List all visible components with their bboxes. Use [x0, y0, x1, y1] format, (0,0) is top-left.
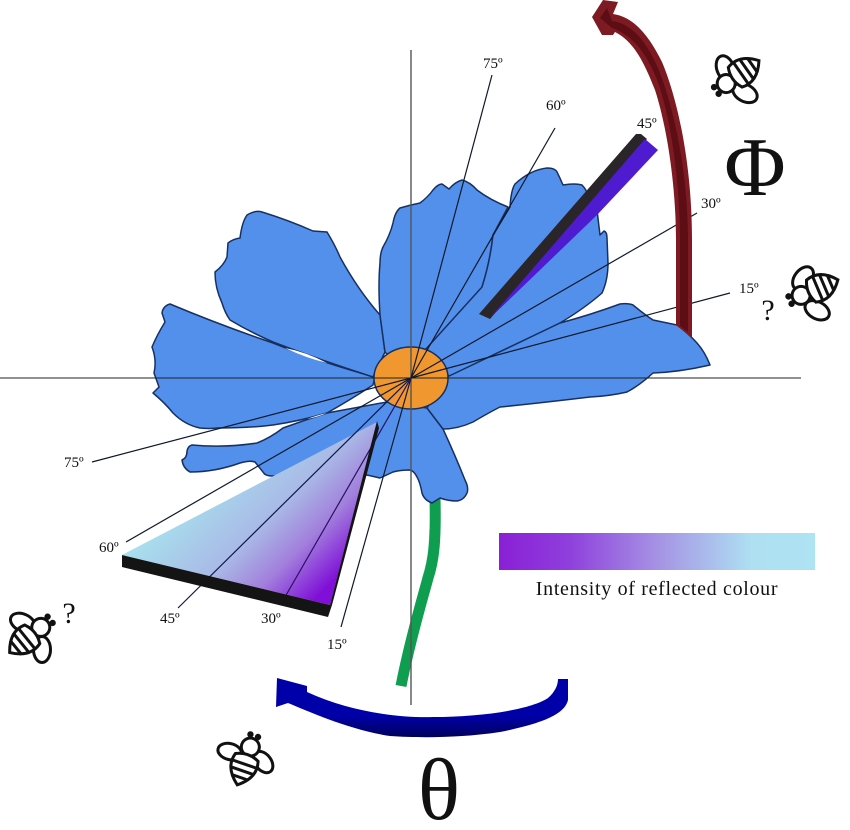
- angle labels: 45º: [637, 116, 657, 132]
- reflectance triangle: [122, 378, 411, 617]
- reflectance bar at 45 degrees: [479, 134, 658, 319]
- angle labels: 75º: [64, 455, 84, 471]
- symbol: phi: Φ: [724, 121, 786, 214]
- axis lines: [0, 50, 801, 705]
- icon: bee right: [777, 253, 850, 333]
- angle labels: 45º: [160, 611, 180, 627]
- icon: bee left: [0, 595, 72, 679]
- angle labels: 75º: [483, 56, 503, 72]
- petal: right: [427, 304, 710, 429]
- petal: top: [379, 180, 508, 378]
- angle lines: [92, 75, 730, 627]
- angle labels: 30º: [261, 611, 281, 627]
- petal gaps: [285, 348, 327, 419]
- icon: bee top right: [699, 38, 778, 119]
- angle labels: 15º: [327, 637, 347, 653]
- angle labels: 60º: [546, 98, 566, 114]
- angle labels: 15º: [739, 281, 759, 297]
- petal: left: [152, 304, 375, 428]
- petal: lower left and bottom: [182, 402, 468, 503]
- angle labels: [64, 56, 759, 653]
- legend gradient bar: [499, 533, 815, 570]
- angle labels: 30º: [701, 196, 721, 212]
- icon: bee bottom: [208, 724, 284, 795]
- petal: upper left: [215, 211, 385, 377]
- arrow: theta, dark blue: [276, 678, 568, 737]
- flower petals: [152, 168, 710, 503]
- arrow: phi, dark red: [592, 0, 692, 338]
- question mark: left bee: ?: [62, 597, 76, 630]
- question mark: right bee: ?: [761, 294, 775, 327]
- stem: [401, 498, 435, 686]
- flower centre: [374, 347, 448, 409]
- legend caption: Intensity of reflected colour: [536, 578, 778, 600]
- angle labels: 60º: [99, 540, 119, 556]
- petal: upper right: [425, 168, 608, 377]
